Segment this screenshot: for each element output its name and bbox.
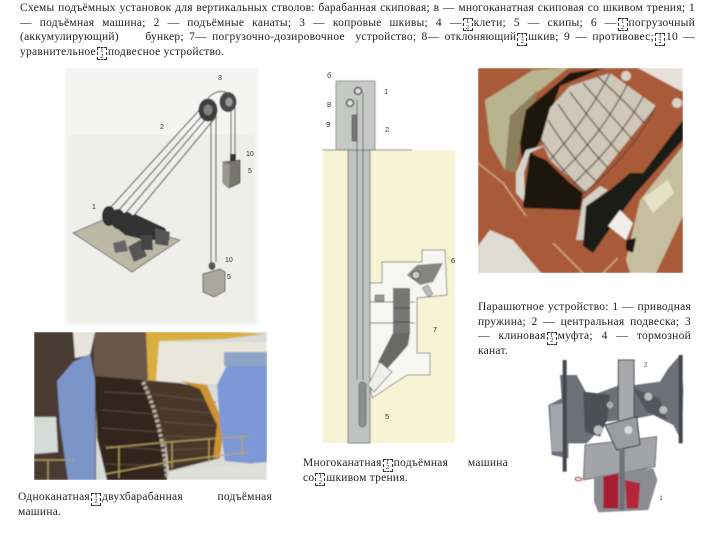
heading text: hoist installation schemes [20,2,695,60]
heading text: hoist installation schemes: 1 [658,32,662,40]
heading text: hoist installation schemes: 2 [521,38,524,45]
caption: multi-rope hoist machine: 1 [386,458,389,466]
heading text: hoist installation schemes: 1 [100,47,103,54]
caption: multi-rope hoist machine: 1 [319,473,322,480]
caption: multi-rope hoist machine [303,457,508,486]
caption: parachute device: 1 [550,332,553,338]
heading text: hoist installation schemes: 1 [521,32,524,40]
labels of the shaft diagram: 8 [327,100,331,109]
heading text: hoist installation schemes: 2 [621,24,624,30]
caption: single-rope double drum machine [18,491,272,518]
labels of the shaft diagram: 7 [433,325,437,334]
caption: parachute device: 2 [550,337,553,344]
labels of the drum hoist diagram [92,75,254,281]
labels of the parachute illustration: 1 [659,496,663,502]
labels of the drum hoist diagram: 10 [225,257,233,264]
caption: parachute device: — клиновая муфта; 4 — тормозной [478,330,691,342]
heading text: hoist installation schemes: 2 [100,52,103,60]
labels of the shaft diagram: 1 [384,87,388,96]
labels of the shaft diagram: 5 [385,412,389,421]
caption: single-rope double drum machine: 1 [94,492,98,500]
heading text: hoist installation schemes: 2 [466,24,469,30]
labels of the shaft diagram: б [327,71,331,80]
caption: multi-rope hoist machine: 2 [386,464,389,471]
heading text: hoist installation schemes: 1 [466,18,469,25]
labels of the shaft diagram: 9 [326,120,330,129]
labels of the parachute illustration [644,362,663,502]
caption: parachute device: канат. [478,344,508,356]
labels of the drum hoist diagram: 5 [248,168,252,175]
caption: multi-rope hoist machine: Многоканатная подъёмная машина [303,457,508,469]
labels of the drum hoist diagram: 1 [92,204,96,211]
photo: blue drum hoist, bottom left [34,332,267,480]
labels of the drum hoist diagram: 2 [160,124,164,131]
photo: friction hoist drum, top right [478,68,683,273]
heading text: hoist installation schemes: 2 [658,38,662,45]
heading text: hoist installation schemes: 1 [621,18,624,25]
caption: single-rope double drum machine: Одноканатная двухбарабанная подъёмная [18,491,272,503]
caption: multi-rope hoist machine: со шкивом трения. [303,472,408,484]
caption: parachute device [478,301,691,356]
labels of the shaft diagram: 2 [385,125,389,134]
heading text: hoist installation schemes: уравнительное подвесное устройство. [20,46,224,58]
caption: single-rope double drum machine: 2 [94,498,98,505]
caption: single-rope double drum machine: машина. [18,506,61,518]
heading text: hoist installation schemes: Схемы подъёмных установок для вертикальных стволов: барабанная скиповая; в — многоканатная скиповая со шкивом трения; 1 [20,2,695,14]
caption: parachute device: Парашютное устройство: 1 — приводная [478,301,691,313]
heading text: hoist installation schemes: (аккумулирующий) бункер; 7— погрузочно-дозировочное устройство; 8— отклоняющий шкив; 9 — противовес; 10 — [20,31,695,43]
labels of the drum hoist diagram: 10 [246,151,254,158]
photo-illustration: parachute device [548,354,684,513]
caption: multi-rope hoist machine: 2 [319,478,322,486]
labels of the shaft diagram [326,71,455,421]
labels of the shaft diagram: 6 [451,256,455,265]
labels of the parachute illustration: 2 [644,362,648,368]
heading text: hoist installation schemes: — подъёмная машина; 2 — подъёмные канаты; 3 — копровые шкивы; 4 — клети; 5 — скипы; 6 — погрузочный [20,16,695,28]
caption: parachute device: пружина; 2 — центральная подвеска; 3 [478,316,691,328]
labels of the drum hoist diagram: 3 [218,75,222,82]
labels of the drum hoist diagram: 5 [227,274,231,281]
